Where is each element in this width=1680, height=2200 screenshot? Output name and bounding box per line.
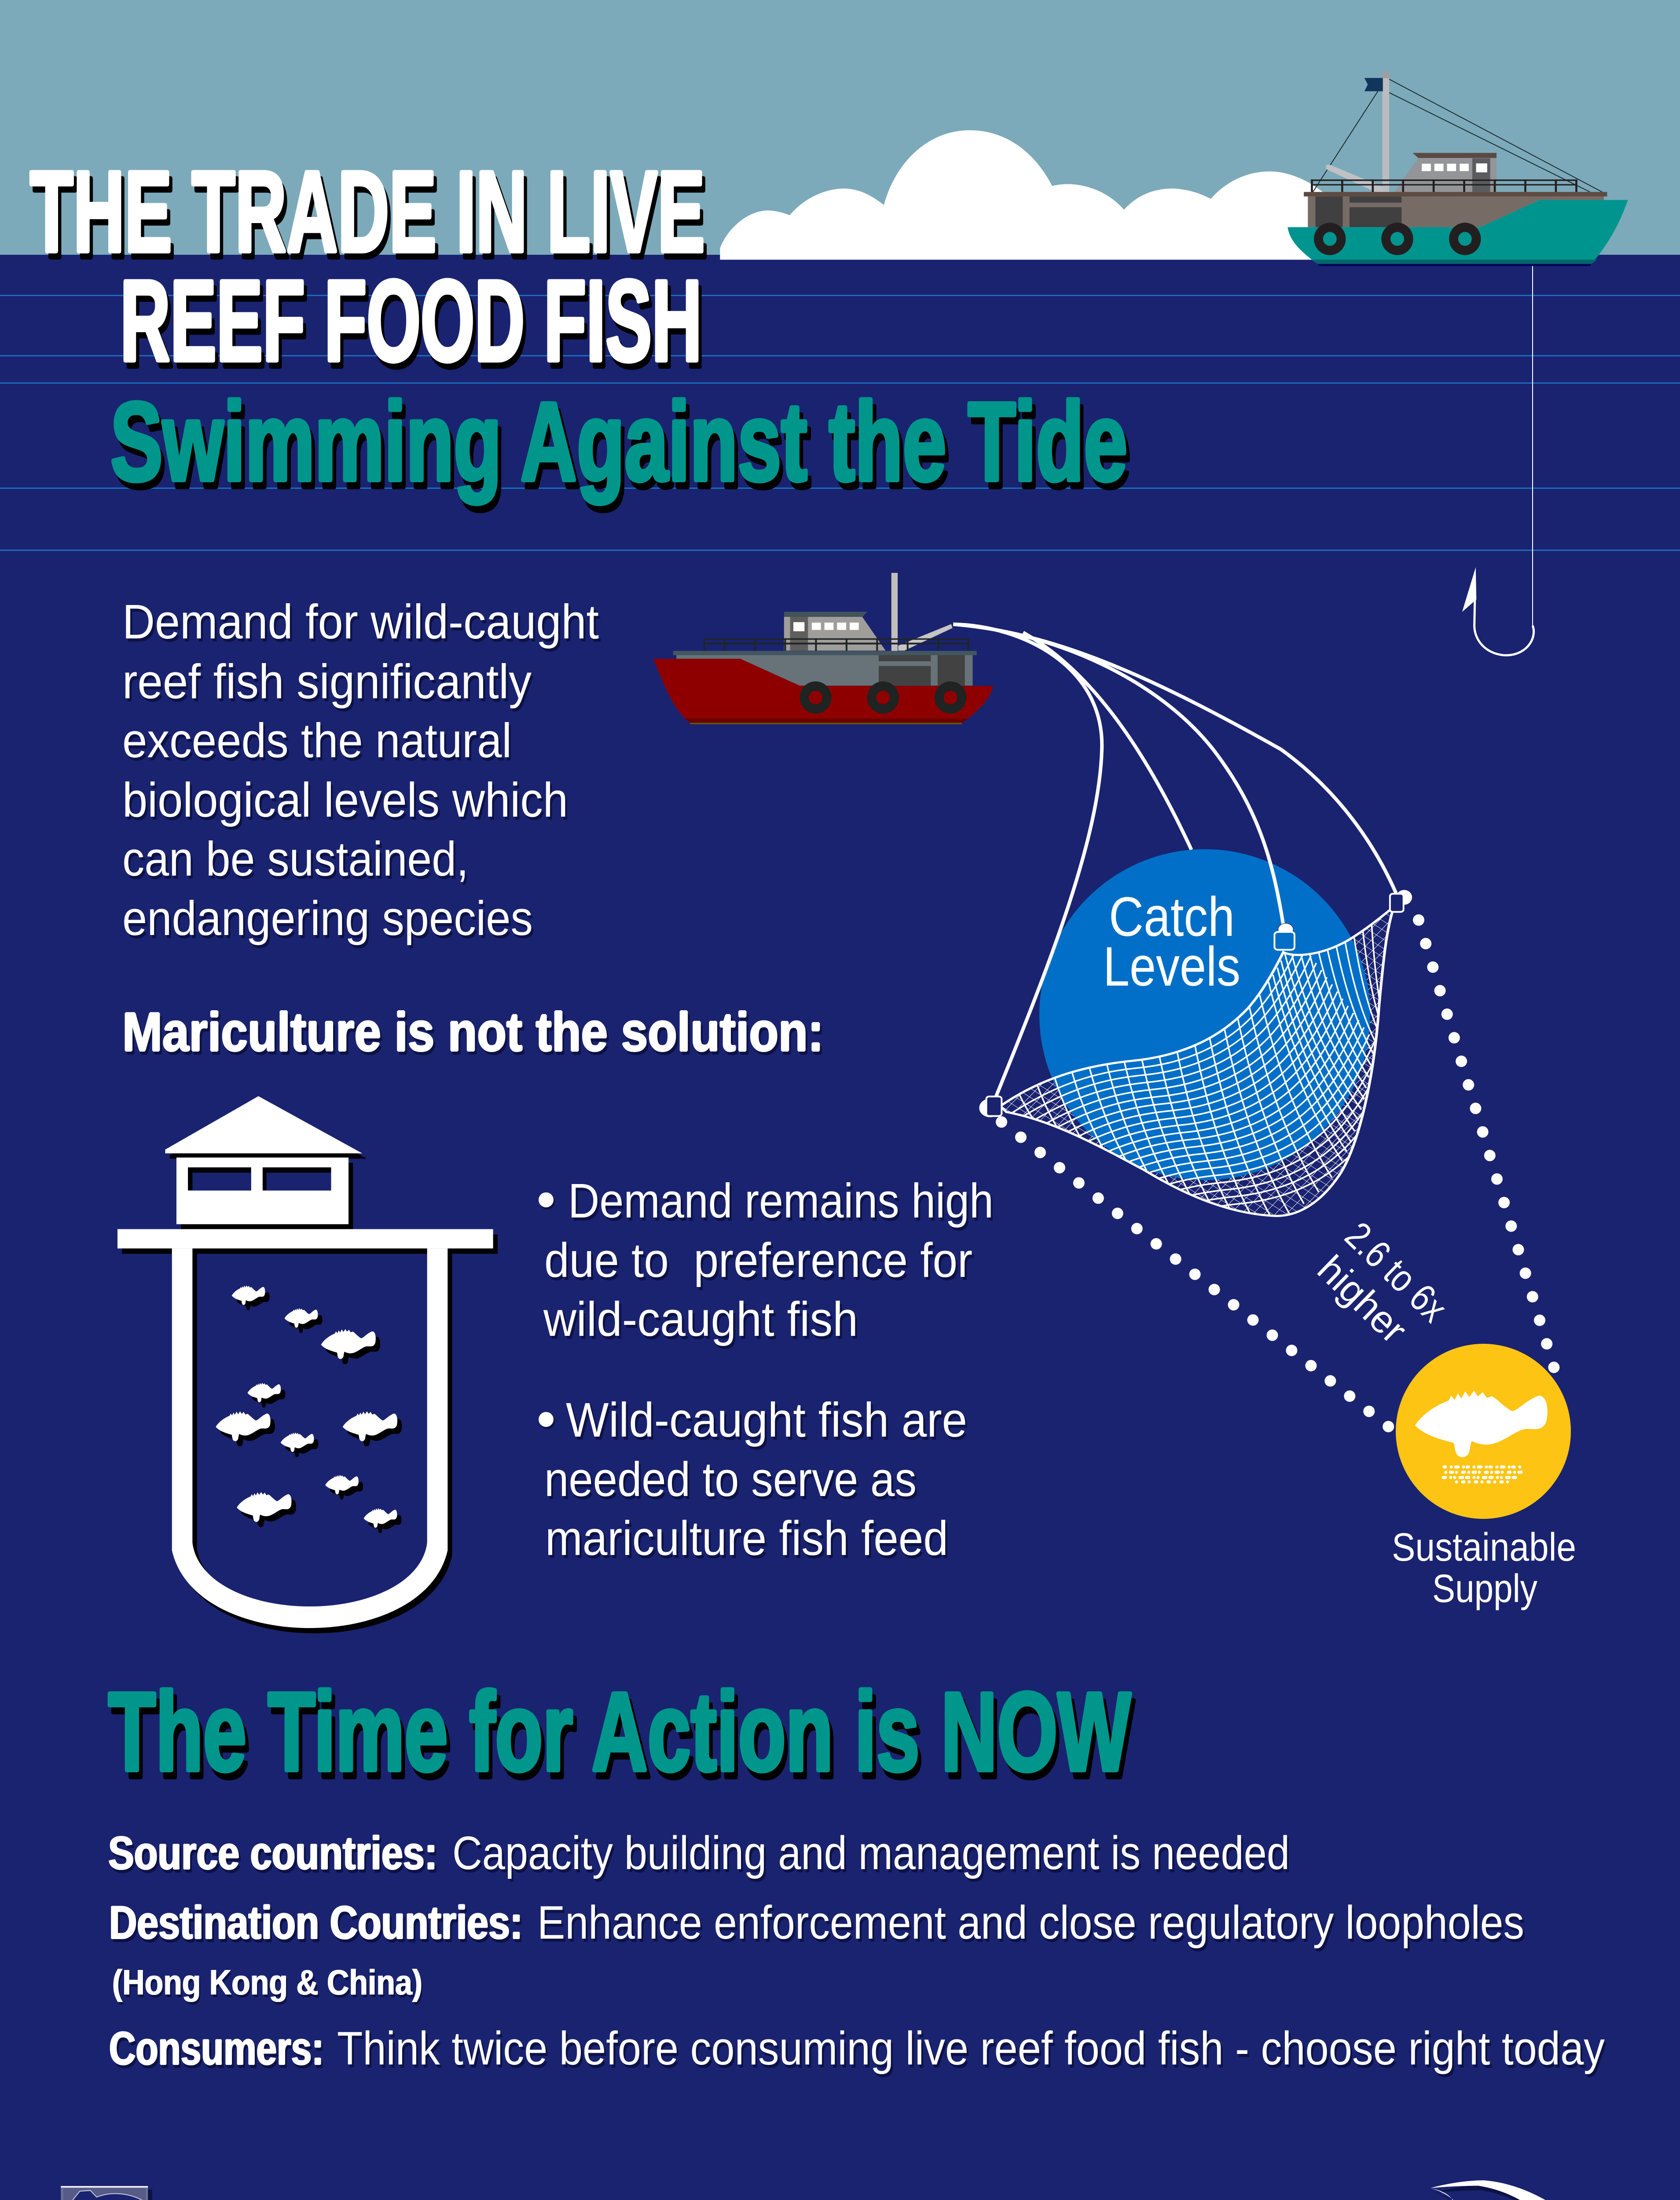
icon: fish feed dots xyxy=(1443,1467,1522,1482)
paragraph: demand: reef fish significantly xyxy=(122,655,532,709)
background: sky xyxy=(0,0,1680,264)
subtitle: Swimming Against the Tide xyxy=(110,379,1127,505)
paragraph: demand: can be sustained, xyxy=(122,832,469,886)
paragraph: demand: Demand for wild-caught xyxy=(122,595,599,649)
circle: catch levels xyxy=(1039,849,1370,1180)
net floats xyxy=(979,890,1412,1118)
bullet list: needed to serve as xyxy=(544,1452,917,1507)
cloud xyxy=(720,130,1328,260)
label: 2.6 to 6x higher: higher xyxy=(1310,1247,1416,1352)
icon: green fishing boat xyxy=(1288,72,1628,266)
paragraph: demand xyxy=(122,595,599,946)
dotted line: left xyxy=(1001,1122,1390,1428)
fishing net xyxy=(979,890,1412,1217)
paragraph: demand: endangering species xyxy=(122,891,533,946)
bullet list: Demand remains high xyxy=(568,1174,994,1228)
label: sustainable supply: Sustainable xyxy=(1392,1525,1576,1569)
action list: Consumers: xyxy=(109,2022,324,2075)
logo: university of hong kong xyxy=(52,2186,667,2200)
label: 2.6 to 6x higher: 2.6 to 6x xyxy=(1337,1214,1456,1330)
action list xyxy=(108,1826,1605,2075)
icon: red trawler xyxy=(653,573,993,724)
bullet list: due to preference for xyxy=(544,1233,972,1287)
bullet list: mariculture fish feed xyxy=(545,1511,948,1566)
paragraph: demand: exceeds the natural xyxy=(122,714,512,768)
fish eye emblem xyxy=(1331,2180,1587,2200)
bullet list: wild-caught fish xyxy=(543,1292,858,1346)
label: catch levels xyxy=(1103,886,1240,997)
logo: choose right today xyxy=(1331,2180,1587,2200)
title xyxy=(30,147,705,385)
paragraph: demand: biological levels which xyxy=(122,773,568,827)
net rope behind circle xyxy=(1023,633,1192,850)
circle: sustainable supply xyxy=(1396,1344,1571,1519)
bullet list xyxy=(539,1174,994,1566)
title: THE TRADE IN LIVE xyxy=(30,147,705,276)
action list: Capacity building and management is needed xyxy=(452,1826,1290,1879)
net back mesh xyxy=(1003,914,1390,1215)
label: sustainable supply: Supply xyxy=(1432,1567,1537,1611)
cage shadow xyxy=(122,1101,498,1633)
fishing line xyxy=(1532,264,1533,626)
net ropes xyxy=(953,624,1396,1096)
dotted line: right xyxy=(1419,920,1555,1370)
crest xyxy=(52,2186,165,2200)
cage structure xyxy=(117,1096,493,1628)
label: catch levels: Catch xyxy=(1109,886,1235,948)
icon: fish in supply circle xyxy=(1415,1391,1548,1457)
action list: Enhance enforcement and close regulatory loopholes xyxy=(537,1896,1524,1949)
cage windows xyxy=(188,1167,331,1191)
subheading: mariculture: Mariculture is not the solution: xyxy=(122,1002,824,1063)
fish shadows xyxy=(220,1291,402,1533)
title: REEF FOOD FISH xyxy=(120,256,702,385)
action list: (Hong Kong & China) xyxy=(112,1963,422,2002)
fish in cage xyxy=(216,1285,397,1528)
icon: mariculture cage xyxy=(117,1096,498,1633)
label: sustainable supply xyxy=(1392,1525,1576,1611)
action list: Source countries: xyxy=(108,1826,437,1879)
label: catch levels: Levels xyxy=(1103,935,1240,997)
bullet list: Wild-caught fish are xyxy=(566,1393,967,1447)
heading: time for action: The Time for Action is NOW xyxy=(108,1669,1131,1795)
icon: fish hook xyxy=(1462,567,1534,655)
action list: Destination Countries: xyxy=(109,1896,523,1949)
